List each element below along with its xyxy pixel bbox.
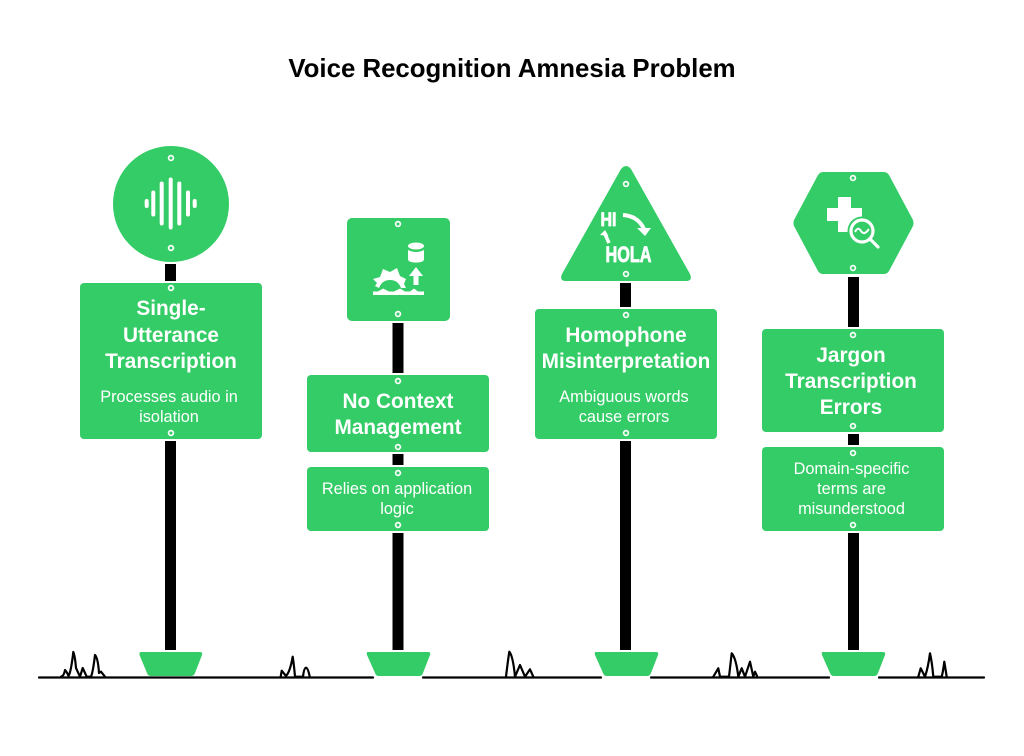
panel: Homophone Misinterpretation: Misinterpretation	[542, 350, 710, 373]
hexagonal sign with medical search icon	[794, 172, 914, 274]
icon: HI to HOLA	[600, 209, 652, 267]
signpost 2: No Context Management	[307, 218, 489, 676]
panel: Single-Utterance Transcription	[80, 283, 262, 439]
panel: Single-Utterance Transcription: Single-	[136, 297, 206, 320]
base 3	[595, 652, 658, 676]
pole 4	[848, 277, 859, 650]
panel: Domain-specific terms are misunderstood	[762, 447, 944, 531]
panel: Homophone Misinterpretation	[535, 309, 717, 439]
icon: HI to HOLA: HI	[600, 209, 616, 231]
pole 3	[620, 283, 631, 650]
panel: Domain-specific terms are misunderstood: Domain-specific	[794, 460, 909, 478]
icon: medical cross with magnifier	[827, 197, 878, 247]
panel: Homophone Misinterpretation: Ambiguous words	[559, 388, 689, 406]
panel: Jargon Transcription Errors	[762, 329, 944, 432]
ground line with grass	[39, 652, 984, 678]
base 2	[367, 652, 430, 676]
icon: gear, water, arrow and database	[373, 242, 424, 295]
icon: HI to HOLA: HOLA	[606, 242, 652, 267]
signpost 3: Homophone Misinterpretation	[535, 166, 717, 676]
panel: Relies on application logic: logic	[380, 500, 414, 518]
circular sign with sound wave icon	[113, 146, 229, 262]
square sign with gear and database icon	[347, 218, 450, 321]
panel: Domain-specific terms are misunderstood: terms are	[817, 480, 886, 498]
panel: Single-Utterance Transcription: Utterance	[123, 324, 219, 347]
pole 1	[165, 264, 176, 650]
signpost 1: Single-Utterance Transcription	[80, 146, 262, 676]
panel: Domain-specific terms are misunderstood: misunderstood	[798, 500, 905, 518]
panel: Homophone Misinterpretation: Homophone	[565, 324, 687, 347]
panel: No Context Management: No Context	[343, 390, 454, 413]
panel: Jargon Transcription Errors: Transcription	[785, 370, 917, 393]
panel: Single-Utterance Transcription: Transcription	[105, 350, 237, 373]
signpost 4: Jargon Transcription Errors	[762, 172, 944, 676]
base 4	[822, 652, 885, 676]
title: Voice Recognition Amnesia Problem	[288, 55, 736, 83]
panel: Single-Utterance Transcription: Processes audio in	[100, 388, 238, 406]
panel: No Context Management	[307, 375, 489, 452]
panel: Single-Utterance Transcription: isolation	[139, 408, 199, 426]
pole 2	[392, 323, 404, 650]
icon: sound wave	[145, 178, 197, 230]
panel: Jargon Transcription Errors: Errors	[820, 396, 882, 419]
panel: Relies on application logic: Relies on application	[322, 480, 472, 498]
panel: Relies on application logic	[307, 467, 489, 531]
triangular sign with translation icon	[561, 166, 691, 281]
panel: No Context Management: Management	[334, 416, 462, 439]
panel: Homophone Misinterpretation: cause errors	[579, 408, 669, 426]
base 1	[139, 652, 202, 676]
panel: Jargon Transcription Errors: Jargon	[816, 344, 886, 367]
